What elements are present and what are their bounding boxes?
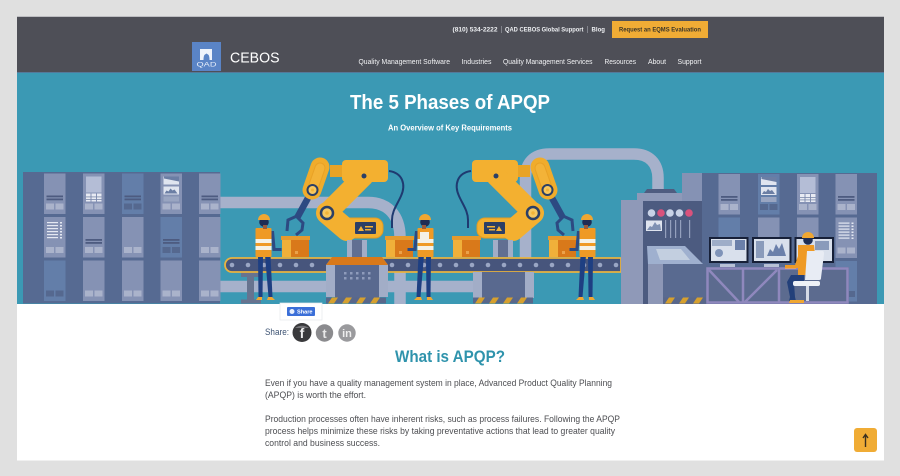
risks paragraph: control and business success. — [265, 438, 380, 449]
computer desk and monitors — [706, 232, 849, 304]
back to top button — [854, 428, 877, 452]
hero banner — [17, 73, 884, 304]
main navigation: Quality Management Services — [503, 59, 593, 66]
left robot base — [326, 257, 388, 304]
conveyor stand — [241, 272, 261, 304]
right robot base — [473, 272, 534, 304]
utility links: (810) 534-2222 — [452, 26, 498, 34]
main navigation: About — [648, 59, 666, 66]
utility links — [452, 26, 605, 34]
risks paragraph: Production processes often have inherent risks, such as process failures. Following the APQP — [265, 414, 620, 425]
icon: linkedin: in — [342, 328, 352, 340]
factory pipes — [220, 154, 658, 304]
monitors — [709, 237, 834, 267]
logo: CEBOS — [230, 50, 280, 66]
utility links: QAD CEBOS Global Support — [505, 26, 584, 34]
intro paragraph: (APQP) is worth the effort. — [265, 390, 366, 401]
utility links: Blog — [592, 26, 605, 34]
workers — [256, 214, 596, 300]
social icons — [292, 323, 356, 342]
intro paragraph — [265, 378, 612, 401]
right robot arm — [457, 160, 573, 304]
icon: twitter: t — [322, 326, 327, 341]
main navigation — [358, 59, 702, 66]
left robot arm — [287, 160, 403, 304]
evaluation button — [612, 21, 708, 38]
icon: facebook: f — [300, 325, 305, 341]
hero subtitle: An Overview of Key Requirements — [388, 124, 513, 132]
logo: QAD — [196, 62, 217, 68]
risks paragraph: process helps minimize these risks by taking preventative actions that lead to greater quality — [265, 426, 615, 437]
share label: Share: — [265, 327, 289, 338]
main navigation: Industries — [462, 59, 492, 66]
facebook share widget: Share — [297, 310, 312, 316]
control dials — [648, 209, 693, 217]
intro paragraph: Even if you have a quality management system in place, Advanced Product Quality Planning — [265, 378, 612, 389]
conveyor belt — [225, 258, 621, 272]
control cabinet — [621, 189, 723, 304]
facebook share widget — [280, 303, 322, 320]
main navigation: Support — [678, 59, 702, 66]
risks paragraph — [265, 414, 620, 449]
logo — [192, 42, 280, 71]
section heading: What is APQP? — [395, 347, 505, 366]
seated operator — [785, 232, 824, 303]
right server racks — [682, 173, 877, 304]
main navigation: Resources — [604, 59, 636, 66]
cardboard boxes — [281, 236, 577, 257]
main navigation: Quality Management Software — [358, 59, 450, 66]
left server racks — [23, 172, 220, 304]
evaluation button: Request an EQMS Evaluation — [619, 26, 701, 34]
site header bar — [17, 16, 884, 74]
hero title: The 5 Phases of APQP — [350, 92, 550, 114]
hazard stripe — [665, 298, 703, 304]
